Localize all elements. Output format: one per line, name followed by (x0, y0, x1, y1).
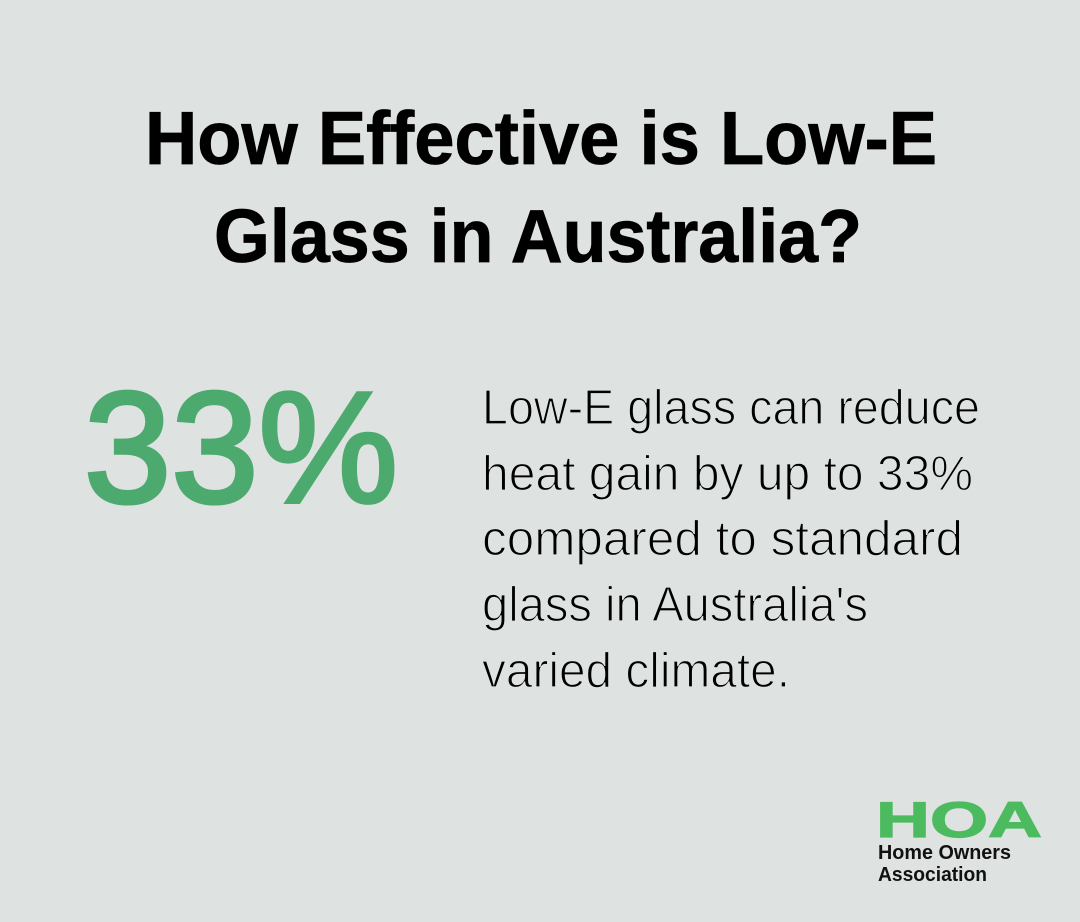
logo name: Home Owners (878, 842, 1011, 864)
logo mark: HOA: HOA (876, 792, 1042, 848)
title: How Effective is Low-E (145, 96, 937, 180)
big stat: 33%: 33% (84, 360, 398, 536)
logo name (878, 842, 1011, 886)
title (145, 96, 937, 278)
description text: heat gain by up to 33% (482, 447, 973, 501)
description text: Low-E glass can reduce (482, 381, 980, 435)
logo: Home Owners Association (876, 792, 1042, 886)
description text (482, 381, 980, 698)
title: Glass in Australia? (214, 194, 862, 278)
description text: glass in Australia's (482, 578, 868, 632)
logo name: Association (878, 864, 987, 886)
description text: compared to standard (482, 512, 963, 566)
description text: varied climate. (482, 644, 790, 698)
